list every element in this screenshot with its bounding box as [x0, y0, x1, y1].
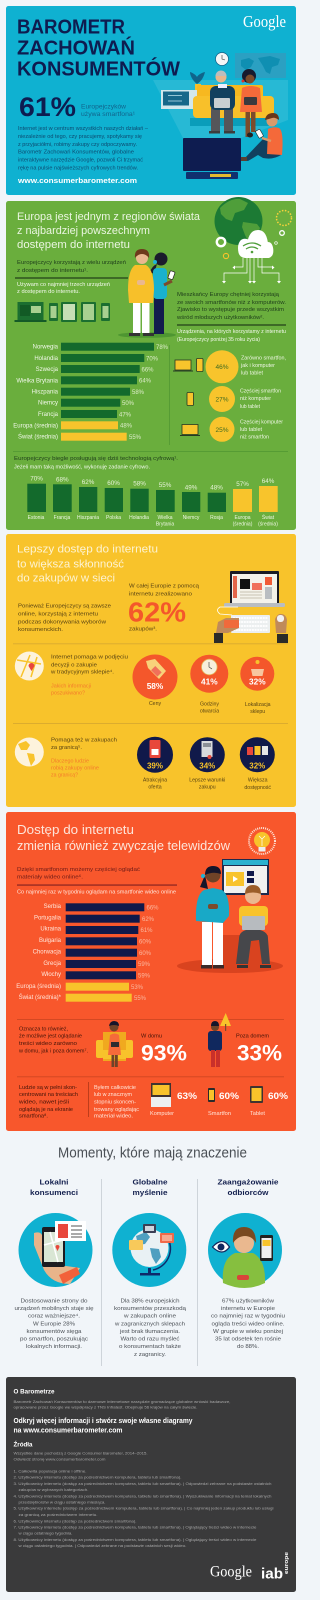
text: focused viewers: oglądają je na ekranie	[19, 1107, 73, 1113]
text: survey statement	[94, 1085, 139, 1119]
text: survey statement: stopniu skoncen-	[94, 1099, 136, 1105]
column chart: digital tasks: 48%	[210, 485, 223, 492]
column text: W grupie w wieku poniżej	[213, 1329, 283, 1335]
title: BAROMETR	[17, 16, 126, 38]
bar chart: weekly video viewing: Grecja	[43, 961, 62, 967]
heading: Europa jest jednym z regionów świata	[17, 211, 201, 223]
logo: iab europe	[261, 1552, 290, 1582]
intro text: interaktywne narzędzie Google, pozwoli Ci trzymać	[18, 158, 143, 164]
text: many devices: z dostępem do internetu.	[17, 289, 80, 295]
bar chart: countries: 64%	[139, 378, 152, 384]
column text: W Europie 28%	[33, 1321, 75, 1327]
heading: to większa skłonność	[17, 558, 125, 570]
chart: device usage circles: 25%	[215, 427, 229, 434]
stat: away from home 33%: 33%	[237, 1040, 282, 1065]
column chart: digital tasks: Estonia	[28, 515, 45, 521]
column chart: digital tasks: Wielka	[157, 515, 173, 521]
bar chart: weekly video viewing: Serbia	[44, 904, 62, 910]
column text: konsumentów przeszkodą	[114, 1306, 187, 1312]
icon: boy with eye and phone	[208, 1213, 282, 1288]
intro text	[18, 126, 148, 171]
heading: zmienia również zwyczaje telewidzów	[17, 839, 231, 853]
chart: reasons for shopping abroad: Lepsze warunki	[189, 777, 225, 783]
text: smartphones vs computers: Mieszkańcy Europy chętniej korzystają	[177, 292, 280, 298]
bar chart: countries: Wielka Brytania	[16, 378, 59, 384]
text: consumers online: online, korzystają z internetu	[18, 612, 98, 618]
bar chart: countries: Holandia	[34, 356, 59, 362]
text: shopping abroad: za granicą⁵.	[51, 744, 82, 751]
bar chart: weekly video viewing: 60%	[139, 940, 152, 946]
heading	[17, 823, 231, 853]
chart: information sought: otwarcia	[200, 709, 219, 715]
heading	[17, 544, 158, 585]
text: shopping abroad: za granicą?	[51, 773, 78, 779]
intro text: Internet jest w centrum wszystkich naszych działań –	[18, 126, 148, 132]
bar chart: countries: 50%	[122, 401, 135, 407]
text: home and away: że możliwe jest oglądanie	[19, 1034, 82, 1040]
text: local store decisions: Internet pomaga w podjęciu	[51, 655, 128, 661]
column text: urządzeń mobilnych staje się	[14, 1306, 94, 1312]
call to action	[14, 1418, 193, 1435]
column chart: digital tasks: Brytania	[156, 522, 174, 528]
column title: Lokalni	[40, 1178, 68, 1187]
bar chart: countries: 78%	[156, 345, 169, 351]
bar chart: weekly video viewing: Chorwacja	[33, 950, 62, 956]
chart: device usage circles: Częściej smartfon	[240, 389, 281, 395]
bar chart: weekly video viewing: Portugalia	[34, 916, 62, 922]
column text: konsumentów sięga	[26, 1329, 82, 1335]
text: home and away: w domu, jak i poza domem⁷.	[19, 1048, 88, 1054]
text: smartphone video: materiały wideo online⁶.	[17, 873, 84, 880]
text: survey statement: trowany oglądając	[94, 1107, 139, 1113]
stat: 61% smartphone	[19, 92, 135, 122]
chart: information sought: Godziny	[200, 702, 219, 708]
column text	[211, 1298, 285, 1350]
column chart: digital tasks: Świat	[262, 513, 275, 521]
stats: devices for focused viewing: Smartfon	[208, 1111, 231, 1117]
column text: jest brak tłumaczenia.	[119, 1329, 180, 1335]
footnotes: 6. Użytkownicy internetu (dostęp za pośrednictwem smartfona).	[14, 1519, 136, 1523]
bar chart: countries: 66%	[142, 367, 154, 373]
column text: do 88%.	[237, 1344, 259, 1350]
footnotes: w ciągu ostatniego tygodnia.	[18, 1531, 72, 1535]
chart: device usage circles: Częściej komputer	[240, 419, 283, 425]
stat: at home 93%: 93%	[141, 1040, 187, 1065]
bar chart: countries: 55%	[129, 435, 142, 441]
footnotes: 8. Użytkownicy internetu (dostęp za pośrednictwem komputera, tabletu lub smartfona). | Oglądający treści wideo w internecie	[14, 1538, 256, 1542]
sources heading: Źródła	[14, 1440, 33, 1449]
column title: Globalne	[132, 1178, 168, 1187]
heading: moments: Momenty, które mają znaczenie	[58, 1145, 247, 1162]
footnotes: 7. Użytkownicy internetu (dostęp za pośrednictwem komputera, tabletu lub smartfona). | Oglądający treści wideo w internecie	[14, 1525, 256, 1529]
stat: 61% smartphone: 61%	[19, 92, 76, 122]
column: global thinking	[112, 1178, 187, 1358]
icons: devices	[14, 302, 110, 322]
logo: Google: Google	[243, 12, 286, 31]
stat: 62% purchases: W całej Europie z pomocą	[129, 584, 200, 590]
text: many devices	[15, 260, 128, 295]
chart: reasons for shopping abroad: 34%	[199, 761, 215, 770]
bar chart: weekly video viewing: 53%	[131, 985, 144, 991]
chart: device usage circles: jak i komputer	[240, 363, 275, 369]
chart: reasons for shopping abroad: Większa	[248, 778, 268, 784]
column title: Zaangażowanie	[218, 1178, 278, 1187]
call to action: Odkryj więcej informacji i stwórz swoje własne diagramy	[14, 1418, 193, 1425]
stat: at home 93%: W domu	[141, 1033, 162, 1039]
call to action: na www.consumerbarometer.com	[14, 1428, 122, 1435]
text: survey statement: lub w znacznym	[94, 1092, 133, 1098]
heading	[17, 211, 201, 251]
bar chart: weekly video viewing: 60%	[139, 951, 152, 957]
column chart: digital tasks: Niemcy	[183, 515, 200, 521]
column text: Dla 38% europejskich	[120, 1298, 180, 1304]
stat: 61% smartphone: używa smartfona¹	[81, 112, 135, 118]
text: digital skills: Europejczycy biegle posługują się dziś technologią cyfrową¹.	[14, 456, 179, 462]
text: shopping abroad: Dlaczego ludzie	[51, 758, 89, 764]
logo: iab europe: europe	[284, 1552, 290, 1574]
column chart: digital tasks	[27, 476, 278, 528]
icon: globe with speech bubbles	[112, 1213, 186, 1287]
bar chart: countries: Francja	[38, 412, 59, 418]
footnotes: 1. Całkowita populacja online i offline.	[14, 1470, 86, 1474]
bar chart: weekly video viewing: Włochy	[41, 972, 61, 978]
logo: iab europe: iab	[261, 1565, 283, 1582]
panel: internet access in Europe	[6, 197, 296, 530]
chart: device usage circles	[173, 350, 286, 442]
footnotes: 5. Użytkownicy internetu (dostęp za pośrednictwem komputera, tabletu lub smartfona). | Co najmniej jeden zakup produktu lub usługi	[14, 1507, 274, 1511]
about text	[14, 1400, 230, 1410]
column chart: digital tasks: Holandia	[129, 515, 149, 521]
bar chart: weekly video viewing: Bułgaria	[39, 938, 62, 944]
text: home and away: Oznacza to również,	[19, 1026, 68, 1032]
logo: Google footer: Google	[210, 1564, 252, 1581]
chart: reasons for shopping abroad	[137, 737, 275, 791]
chart: reasons for shopping abroad: dostępność	[244, 785, 271, 791]
column text: ogląda treści wideo online.	[212, 1321, 285, 1327]
chart: information sought	[132, 654, 274, 715]
bar chart: weekly video viewing: 61%	[140, 928, 153, 934]
column title: konsumenci	[30, 1188, 78, 1197]
column text: lokalnych informacji.	[26, 1344, 82, 1350]
chart: reasons for shopping abroad: Atrakcyjna	[143, 777, 167, 783]
column text	[114, 1298, 187, 1358]
illustration: standing man and road sign	[208, 1013, 231, 1067]
illustration: boy and girl with phones	[118, 249, 176, 338]
text: smartphones vs computers: (Europejczycy poniżej 35 roku życia)	[177, 337, 260, 343]
column title	[218, 1178, 278, 1197]
chart: information sought: 32%	[249, 677, 266, 687]
bar chart: countries: Hiszpania	[32, 390, 59, 396]
stats: devices for focused viewing: 63%	[177, 1091, 198, 1102]
chart: reasons for shopping abroad: zakupu	[199, 785, 216, 791]
text: focused viewers: smartfona⁸.	[19, 1113, 48, 1119]
text: smartphones vs computers	[176, 292, 287, 343]
heading: Lepszy dostęp do internetu	[17, 544, 158, 556]
intro text: z przyjaciółmi, robimy zakupy czy odpoczywamy.	[18, 142, 137, 148]
column chart: digital tasks: Francja	[54, 515, 71, 521]
about text: opracowane przez Google we współpracy z TNS Infratest. Obejmuje 56 krajów na całym świecie.	[14, 1406, 197, 1410]
bar chart: weekly video viewing: Świat (średnia)*	[19, 993, 62, 1001]
heading: dostępem do internetu	[17, 239, 130, 251]
title: ZACHOWAŃ	[17, 36, 135, 60]
column chart: digital tasks: Europa	[234, 515, 251, 521]
illustration: globe and cloud	[214, 197, 292, 284]
title: KONSUMENTÓW	[17, 56, 180, 80]
text: many devices: Używam co najmniej trzech urządzeń	[17, 282, 110, 288]
bar chart: weekly video viewing: Europa (średnia)	[16, 984, 61, 990]
text: shopping abroad: Pomaga też w zakupach	[51, 737, 117, 743]
footnotes: 3. Użytkownicy internetu (dostęp za pośrednictwem komputera, tabletu lub smartfona). | Odpowiedzi zebrane na podstawie ostatnich	[14, 1482, 272, 1486]
footnotes: za granicą za pośrednictwem internetu.	[18, 1513, 98, 1517]
text: local store decisions: poszukiwano?	[51, 691, 85, 697]
text: local store decisions	[50, 655, 128, 697]
chart: device usage circles: 46%	[215, 364, 229, 371]
bar chart: countries: 58%	[132, 390, 145, 396]
bar chart: countries: Szwecja	[36, 367, 59, 373]
chart: reasons for shopping abroad: 39%	[147, 761, 163, 770]
column chart: digital tasks: Hiszpania	[77, 515, 99, 521]
text: smartphone video	[17, 867, 177, 895]
bar chart: countries	[13, 343, 169, 441]
bar chart: weekly video viewing: Ukraina	[40, 926, 62, 932]
illustration: family in living room	[153, 52, 288, 179]
chart: device usage circles: niż smartfon	[240, 435, 269, 441]
footnotes: 2. Użytkownicy internetu (dostęp za pośrednictwem komputera, tabletu lub smartfona).	[14, 1476, 182, 1480]
footnotes: 4. Użytkownicy internetu (dostęp za pośrednictwem komputera, tabletu lub smartfona). | Wyszukiwanie informacji na temat lokalnych	[14, 1494, 272, 1498]
chart: information sought: 58%	[147, 681, 164, 691]
panel: hero	[6, 6, 296, 195]
chart: device usage circles: lub tablet	[240, 427, 263, 433]
text: local store decisions: decyzji o zakupie	[51, 662, 97, 668]
column text: internetu w Europie	[221, 1306, 275, 1312]
sources text: Odwiedź stronę www.consumerbarometer.com	[14, 1458, 106, 1462]
text: many devices: z dostępem do internetu¹.	[17, 268, 89, 274]
column: engaged viewers	[208, 1178, 285, 1350]
stats: devices for focused viewing: 60%	[268, 1091, 289, 1102]
heading: Dostęp do internetu	[17, 823, 134, 837]
text: local store decisions: Jakich informacji	[51, 683, 91, 689]
column text: z zagranicy.	[134, 1352, 166, 1358]
column chart: digital tasks: 57%	[236, 481, 249, 488]
intro text: niezależnie od tego, czy pracujemy, spotykamy się	[18, 134, 142, 140]
text: smartphone video: Dzięki smartfonom możemy częściej oglądać	[17, 867, 140, 873]
text: consumers online	[18, 604, 111, 633]
column chart: digital tasks: 70%	[30, 476, 43, 483]
panel: about and sources	[6, 1377, 296, 1592]
chart: device usage circles: lub tablet	[240, 404, 260, 410]
footnotes: przedsiębiorstw w ciągu ostatniego miesiąca.	[18, 1501, 106, 1505]
text: many devices: Europejczycy korzystają z wielu urządzeń	[17, 260, 126, 266]
heading: do zakupów w sieci	[17, 573, 115, 585]
intro text: rękę na pulsie najświeższych cyfrowych trendów.	[18, 165, 138, 171]
text: smartphone video: Co najmniej raz w tygodniu oglądam na smartfonie wideo online	[17, 889, 176, 895]
column text: Warto od razu myśleć	[120, 1336, 180, 1342]
heading: z najbardziej powszechnym	[17, 225, 150, 237]
text: digital skills: Jeżeli mam taką możliwość, wykonuję zadanie cyfrowo.	[14, 464, 150, 470]
column chart: digital tasks: Rosja	[210, 515, 223, 521]
text: home and away	[19, 1026, 88, 1054]
text: home and away: treści wideo zarówno	[19, 1041, 77, 1047]
text: focused viewers: centrowani na treściach	[19, 1092, 78, 1098]
column text: coraz ważniejsze⁴.	[28, 1313, 80, 1320]
text: smartphones vs computers: Urządzenia, na których korzystamy z internetu	[177, 329, 286, 335]
sources text: Wszystkie dane pochodzą z Google Consumer Barometer, 2014–2015.	[14, 1452, 148, 1456]
footnotes: zakupów w wybranych kategoriach.	[18, 1488, 88, 1492]
column title	[30, 1178, 78, 1197]
stats: devices for focused viewing: Tablet	[250, 1111, 266, 1117]
chart: information sought: sklepu	[250, 709, 265, 715]
illustration: laptop and credit card	[214, 571, 288, 643]
bar chart: weekly video viewing: 59%	[138, 962, 151, 968]
bar chart: weekly video viewing: 59%	[138, 974, 151, 980]
chart: reasons for shopping abroad: oferta	[148, 785, 162, 791]
text: shopping abroad: robią zakupy online	[51, 765, 99, 771]
column text: Dostosowanie strony do	[20, 1298, 88, 1304]
column chart: digital tasks: 49%	[185, 484, 198, 491]
bar chart: countries: Europa (średnia)	[13, 423, 58, 429]
column text	[14, 1298, 94, 1350]
column text: o konsumentach także	[119, 1344, 181, 1350]
bar chart: countries: 47%	[119, 412, 132, 418]
chart: reasons for shopping abroad: 32%	[249, 761, 265, 770]
stats: devices for focused viewing: 60%	[219, 1091, 240, 1102]
stat: 61% smartphone: Europejczyków	[81, 105, 127, 111]
stat: 62% purchases	[128, 584, 200, 633]
column text: w zakupach online	[123, 1314, 176, 1320]
bar chart: countries: Norwegia	[33, 345, 59, 351]
column chart: digital tasks: 60%	[107, 480, 120, 487]
bar chart: weekly video viewing: 55%	[134, 996, 147, 1002]
column title: odbiorców	[228, 1188, 269, 1197]
icon: globe	[15, 738, 44, 766]
bar chart: weekly video viewing: 62%	[142, 917, 155, 923]
bar chart: countries: Świat (średnia)	[18, 433, 58, 441]
chart: device usage circles: 27%	[215, 396, 229, 404]
bar chart: countries: Niemcy	[38, 401, 58, 407]
column chart: digital tasks: (średnia)	[233, 522, 253, 528]
bar chart: countries: 70%	[146, 356, 159, 362]
column chart: digital tasks: 62%	[82, 479, 95, 486]
text: shopping abroad	[51, 737, 117, 779]
chart: information sought: Lokalizacja	[245, 702, 271, 708]
icon: map pin	[15, 652, 44, 680]
panel: online video	[6, 812, 296, 1131]
title	[17, 16, 180, 80]
column chart: digital tasks: Polska	[106, 515, 121, 521]
text: smartphones vs computers: wśród młodszych użytkowników².	[176, 315, 265, 321]
column title: myślenie	[132, 1188, 168, 1197]
chart: information sought: 41%	[201, 677, 218, 687]
stats: devices for focused viewing	[150, 1083, 289, 1117]
about heading: O Barometrze	[14, 1389, 55, 1396]
url: www.consumerbarometer.com	[17, 176, 137, 185]
text: focused viewers	[19, 1085, 78, 1119]
stat: 62% purchases: internetu zrealizowano	[129, 591, 192, 597]
column chart: digital tasks: 55%	[159, 482, 172, 489]
icon: light bulb	[249, 828, 275, 854]
bar chart: countries: 48%	[120, 424, 133, 430]
text: smartphones vs computers: ze swoich smartfonów niż z komputerów.	[177, 300, 287, 306]
footnotes	[14, 1470, 274, 1548]
text: digital skills	[14, 456, 179, 470]
column chart: digital tasks: 58%	[133, 481, 146, 488]
icon: hand with phone map	[18, 1213, 92, 1287]
chart: device usage circles: lub tablet	[241, 371, 264, 377]
column text: co najmniej raz w tygodniu	[211, 1314, 285, 1320]
stat: 62% purchases: 62%	[128, 596, 186, 627]
text: consumers online: konsumenckich.	[18, 627, 64, 633]
about text: Barometr Zachowań Konsumentów to darmowe internetowe narzędzie gromadzące globalne wnioski badawcze,	[14, 1400, 230, 1404]
text: consumers online: Ponieważ Europejczycy są zawsze	[18, 604, 111, 610]
text: consumers online: podczas dokonywania wyborów	[18, 619, 106, 625]
chart: device usage circles: Zarówno smartfon,	[241, 355, 286, 361]
column chart: digital tasks: 64%	[262, 478, 275, 485]
chart: information sought: Ceny	[149, 701, 161, 707]
bar chart: weekly video viewing	[16, 903, 159, 1002]
illustration: woman in armchair	[96, 1021, 133, 1067]
column text: w zagranicznych sklepach	[114, 1321, 185, 1327]
panel: online shopping	[6, 534, 296, 807]
stats: devices for focused viewing: Komputer	[150, 1111, 174, 1117]
column text: 67% użytkowników	[222, 1298, 275, 1304]
text: survey statement: materiał wideo.	[94, 1113, 133, 1119]
text: focused viewers: Ludzie są w pełni skon-	[19, 1085, 77, 1091]
column text: po smartfon, poszukując	[20, 1336, 88, 1342]
footnotes: w ciągu ostatniego tygodnia. | Odpowiedzi zebrane na podstawie ostatnich sesji wideo.	[18, 1544, 186, 1548]
illustration: woman and man watching video	[177, 859, 283, 973]
text: focused viewers: wideo, nawet jeśli	[19, 1099, 69, 1105]
column chart: digital tasks: (średnia)	[258, 522, 278, 528]
stat: 62% purchases: zakupów³.	[129, 627, 158, 633]
text: survey statement: Byłem całkowicie	[94, 1085, 136, 1091]
text: local store decisions: w tradycyjnym sklepie⁴.	[50, 669, 115, 676]
column: local consumers	[14, 1178, 94, 1350]
stat: away from home 33%: Poza domem	[236, 1033, 269, 1039]
column title	[132, 1178, 168, 1197]
intro text: Barometr Zachowań Konsumentów, globalne	[18, 150, 134, 156]
chart: device usage circles: niż komputer	[240, 396, 271, 402]
column chart: digital tasks: 68%	[56, 476, 69, 484]
sources text	[14, 1452, 148, 1462]
column text: 35 lat odsetek ten rośnie	[215, 1336, 281, 1342]
text: smartphones vs computers: Zjawisko to występuje przede wszystkim	[177, 307, 284, 313]
bar chart: weekly video viewing: 66%	[146, 906, 159, 912]
